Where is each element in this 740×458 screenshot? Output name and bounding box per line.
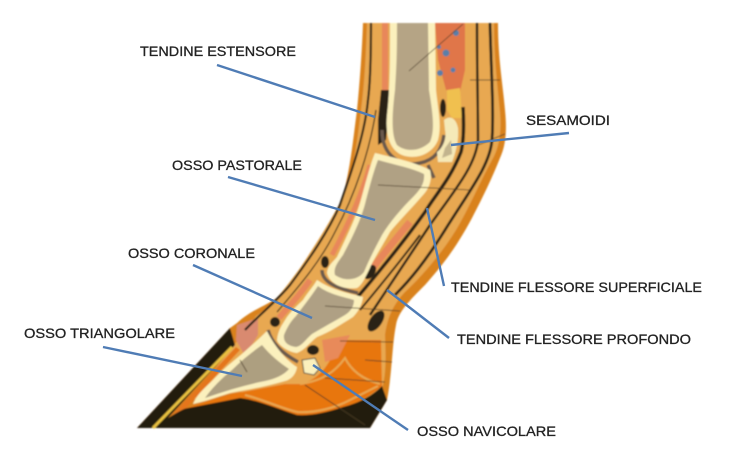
label: osso pastorale: OSSO PASTORALE — [172, 157, 302, 173]
thin leader lines on the drawing — [240, 24, 505, 425]
illustration: leg cross-section — [137, 23, 506, 428]
blue marrow spots — [437, 30, 459, 76]
bone: cannon — [387, 23, 440, 157]
orange front strip of wall — [172, 347, 240, 415]
bone: coronal — [277, 280, 363, 353]
label: osso coronale: OSSO CORONALE — [128, 245, 255, 261]
pointer: sesamoidi — [451, 133, 569, 145]
orange sole and digital cushion — [180, 340, 382, 415]
pointer: tendine estensore — [217, 65, 375, 117]
bone: sesamoid — [437, 118, 458, 162]
label: osso triangolare: OSSO TRIANGOLARE — [24, 325, 175, 341]
dark joint masses — [270, 90, 446, 355]
pink stripes — [279, 23, 410, 318]
yellow hoof stripe — [153, 347, 232, 428]
pink and purple front tissue — [236, 318, 258, 356]
leg outer silhouette — [137, 23, 506, 428]
pointer: osso navicolare — [313, 365, 408, 430]
black tendon lines — [245, 23, 493, 330]
orange wedge tissue — [322, 335, 350, 362]
tan soft tissue — [190, 23, 501, 404]
pointer: osso pastorale — [228, 177, 375, 220]
yellow fat pad — [447, 88, 462, 118]
pointer: tendine flessore superficiale — [427, 208, 444, 286]
pointer: osso coronale — [193, 265, 312, 318]
joint capsule lines — [268, 130, 444, 362]
marrow red tissue at top — [435, 23, 465, 92]
black hoof wall and sole — [137, 328, 387, 428]
label: tendine flessore profondo: TENDINE FLESSORE PROFONDO — [457, 331, 691, 347]
bone: navicular — [302, 358, 320, 375]
pointer: tendine flessore profondo — [387, 290, 449, 338]
label: tendine flessore superficiale: TENDINE FLESSORE SUPERFICIALE — [451, 279, 702, 295]
bone: pastern — [327, 153, 431, 288]
label: tendine estensore: TENDINE ESTENSORE — [140, 43, 296, 59]
tan band around the cushion — [300, 358, 380, 384]
label: sesamoidi: SESAMOIDI — [526, 112, 610, 128]
label: osso navicolare: OSSO NAVICOLARE — [417, 423, 556, 439]
tan band above the sole edge — [245, 386, 378, 412]
pointer: osso triangolare — [103, 347, 242, 376]
bone: triangular — [193, 331, 297, 404]
